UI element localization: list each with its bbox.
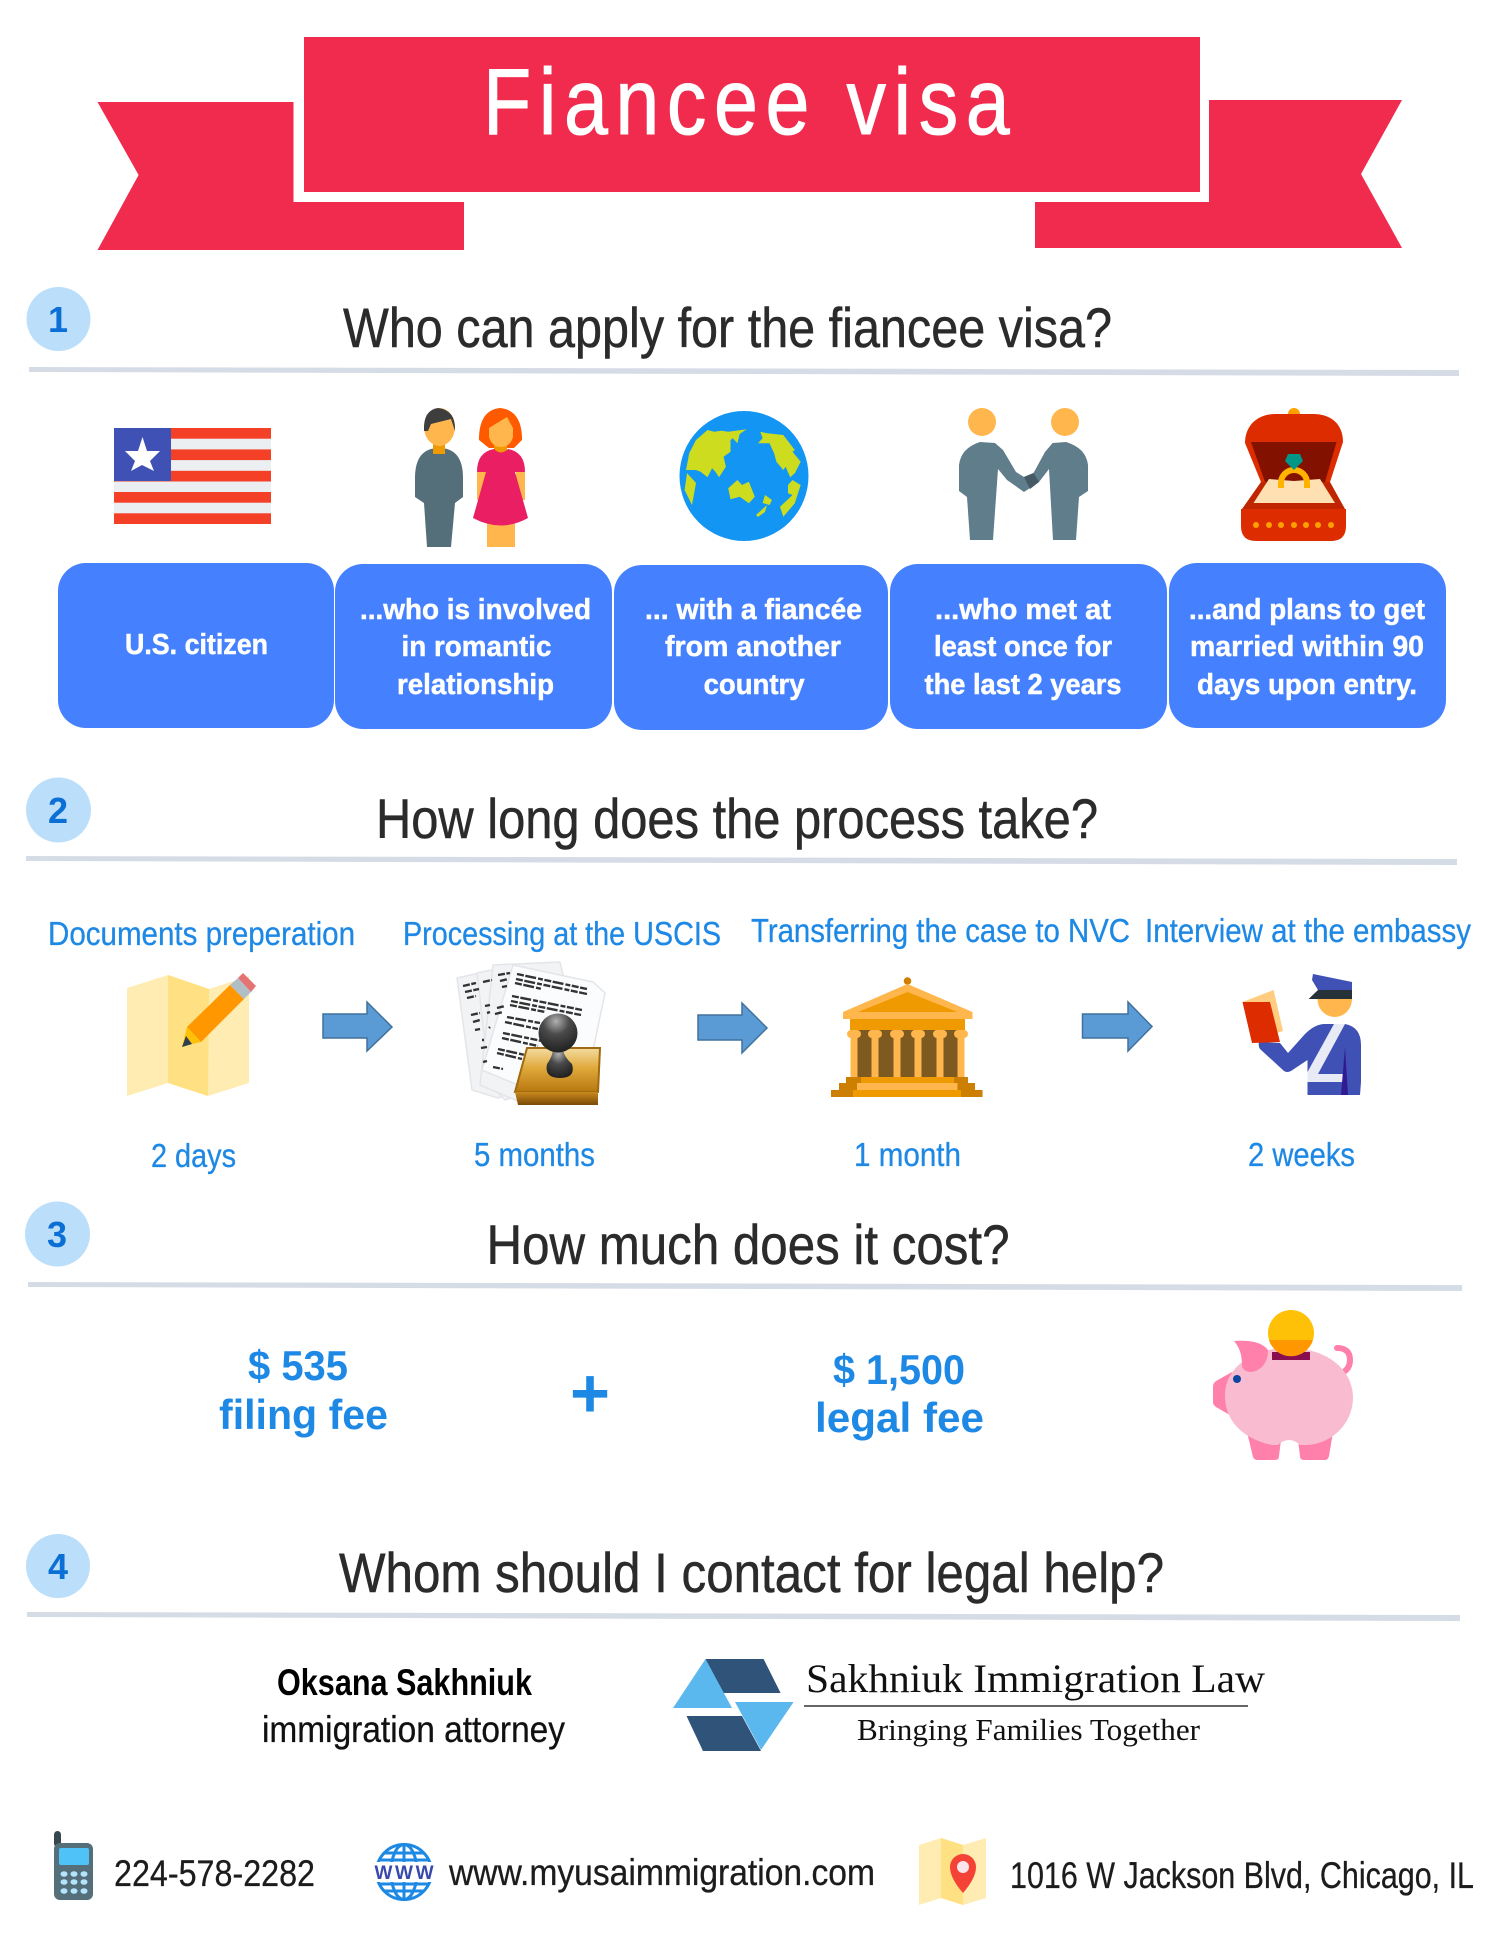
number badge 4: [26, 1534, 90, 1598]
box: U.S. citizen: U.S. citizen: [125, 629, 268, 661]
icon: map pin: [919, 1838, 986, 1905]
filing fee: $ 535: [248, 1342, 348, 1389]
icon: www globe: [373, 1844, 435, 1900]
box: romantic relationship: in romantic: [402, 631, 552, 663]
firm tagline: Bringing Families Together: [857, 1712, 1201, 1747]
ribbon centre: [304, 37, 1200, 192]
duration labels: 2 weeks: [1248, 1136, 1355, 1173]
ribbon left tail: [98, 102, 464, 250]
box: met in person: ...who met at: [935, 594, 1111, 626]
box: met in person: [890, 564, 1167, 729]
title banner: [98, 37, 1402, 250]
stamp: [515, 1014, 600, 1105]
box: fiancee abroad: [614, 565, 888, 730]
logo mark: [673, 1659, 794, 1751]
number badge 4: 4: [48, 1546, 68, 1587]
section 4 header: [26, 1534, 1460, 1621]
divider 4: [27, 1612, 1460, 1621]
arrow 3: [1082, 1002, 1152, 1051]
contact: website: www.myusaimmigration.com: [448, 1852, 875, 1893]
legal fee: $ 1,500: [833, 1346, 965, 1393]
duration labels: 2 days: [151, 1137, 236, 1174]
filing fee: filing fee: [219, 1391, 388, 1438]
ribbon right tail: [1035, 100, 1402, 248]
box: met in person: the last 2 years: [924, 669, 1122, 701]
box: romantic relationship: relationship: [397, 669, 554, 701]
contact: website: [373, 1844, 875, 1900]
man: [415, 408, 463, 547]
box: plans to marry: [1169, 563, 1446, 728]
number badge 3: 3: [47, 1214, 67, 1255]
duration labels: [151, 1136, 1355, 1174]
number badge 1: 1: [48, 299, 68, 340]
box: romantic relationship: [335, 564, 612, 729]
duration labels: 5 months: [474, 1136, 595, 1173]
step labels: Interview at the embassy: [1145, 912, 1471, 949]
number badge 3: [25, 1202, 90, 1266]
firm logo: [673, 1656, 1265, 1751]
section 2 header: [26, 778, 1457, 865]
legal fee: legal fee: [815, 1394, 984, 1441]
firm name: Sakhniuk Immigration Law: [806, 1656, 1265, 1701]
legal fee: [815, 1346, 984, 1441]
contact: phone: 224-578-2282: [114, 1853, 315, 1894]
step labels: Processing at the USCIS: [403, 915, 721, 952]
number badge 2: [26, 778, 91, 842]
box: met in person: least once for: [934, 631, 1112, 663]
icon: ring box: [1241, 408, 1346, 541]
panel: eligibility boxes: [58, 563, 1446, 730]
icon: globe: [680, 411, 808, 541]
step labels: [48, 912, 1471, 952]
box: plans to marry: days upon entry.: [1197, 669, 1417, 701]
icon: couple: [415, 408, 528, 547]
step labels: Documents preperation: [48, 915, 355, 952]
heading 3: How much does it cost?: [486, 1213, 1010, 1276]
heading 1: Who can apply for the fiancee visa?: [343, 296, 1112, 359]
section 1 header: [26, 287, 1459, 376]
box: plans to marry: married within 90: [1190, 631, 1424, 663]
plus sign: +: [570, 1354, 610, 1432]
box: plans to marry: ...and plans to get: [1189, 594, 1425, 626]
arrow 1: [323, 1002, 392, 1051]
icon: piggy bank: [1213, 1310, 1353, 1460]
icon: officer with passport: [1242, 974, 1361, 1095]
woman: [473, 408, 528, 547]
icon: flag: [114, 428, 271, 524]
number badge 2: 2: [48, 790, 68, 831]
divider 2: [26, 856, 1457, 865]
filing fee: [219, 1342, 388, 1438]
box: romantic relationship: ...who is involved: [360, 594, 591, 626]
icon: map and pencil: [127, 973, 256, 1096]
icon: www globe: WWW: [374, 1863, 434, 1884]
attorney name: Oksana Sakhniuk: [277, 1662, 532, 1703]
number badge 1: [26, 287, 90, 351]
icon: mobile phone: [54, 1831, 93, 1900]
step labels: Transferring the case to NVC: [751, 912, 1130, 949]
box: fiancee abroad: from another: [665, 631, 841, 663]
divider 3: [28, 1282, 1462, 1291]
heading 2: How long does the process take?: [376, 787, 1098, 850]
section 3 header: [25, 1202, 1462, 1291]
title: Fiancee visa: [483, 50, 1010, 155]
box: fiancee abroad: country: [704, 669, 805, 701]
box: fiancee abroad: ... with a fiancée: [645, 594, 862, 626]
heading 4: Whom should I contact for legal help?: [339, 1541, 1164, 1604]
attorney name: immigration attorney: [262, 1709, 565, 1750]
divider 1: [29, 367, 1459, 376]
duration labels: 1 month: [854, 1136, 961, 1173]
icon: government building: [831, 977, 982, 1097]
icon: handshake: [959, 408, 1088, 540]
contact: phone: [54, 1831, 315, 1900]
arrow 2: [698, 1003, 767, 1053]
icon: documents and stamp: [457, 962, 605, 1105]
contact: address: [919, 1838, 1474, 1905]
attorney name: [262, 1662, 565, 1750]
box: U.S. citizen: [58, 563, 334, 728]
